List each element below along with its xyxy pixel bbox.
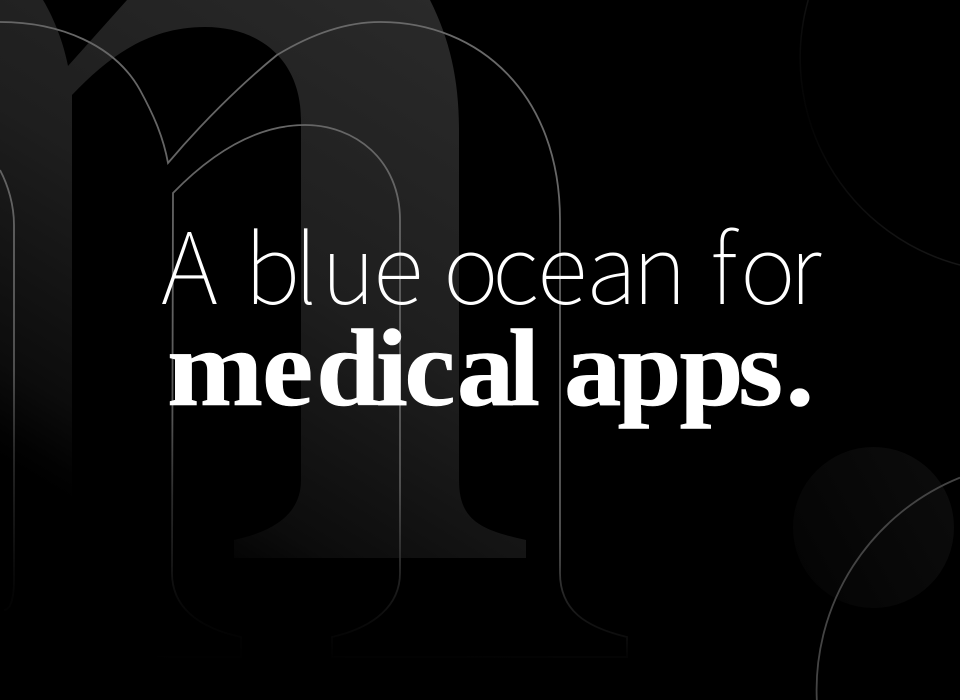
headline line one: ocean — [443, 195, 687, 332]
headline line two: apps. — [564, 308, 814, 429]
headline — [161, 189, 822, 429]
headline line one: blue — [244, 195, 423, 332]
outlined dot arc — [817, 478, 960, 700]
headline line two — [167, 308, 814, 429]
filled letter m — [0, 0, 526, 560]
filled dot — [793, 447, 954, 608]
faint arc top right — [800, 0, 960, 265]
headline line two: medical — [167, 308, 540, 429]
bottom fade over outline — [0, 565, 700, 665]
outlined letter m — [0, 22, 627, 657]
headline line one: A — [161, 189, 218, 333]
headline line one: for — [710, 195, 822, 332]
headline line one — [161, 189, 822, 333]
